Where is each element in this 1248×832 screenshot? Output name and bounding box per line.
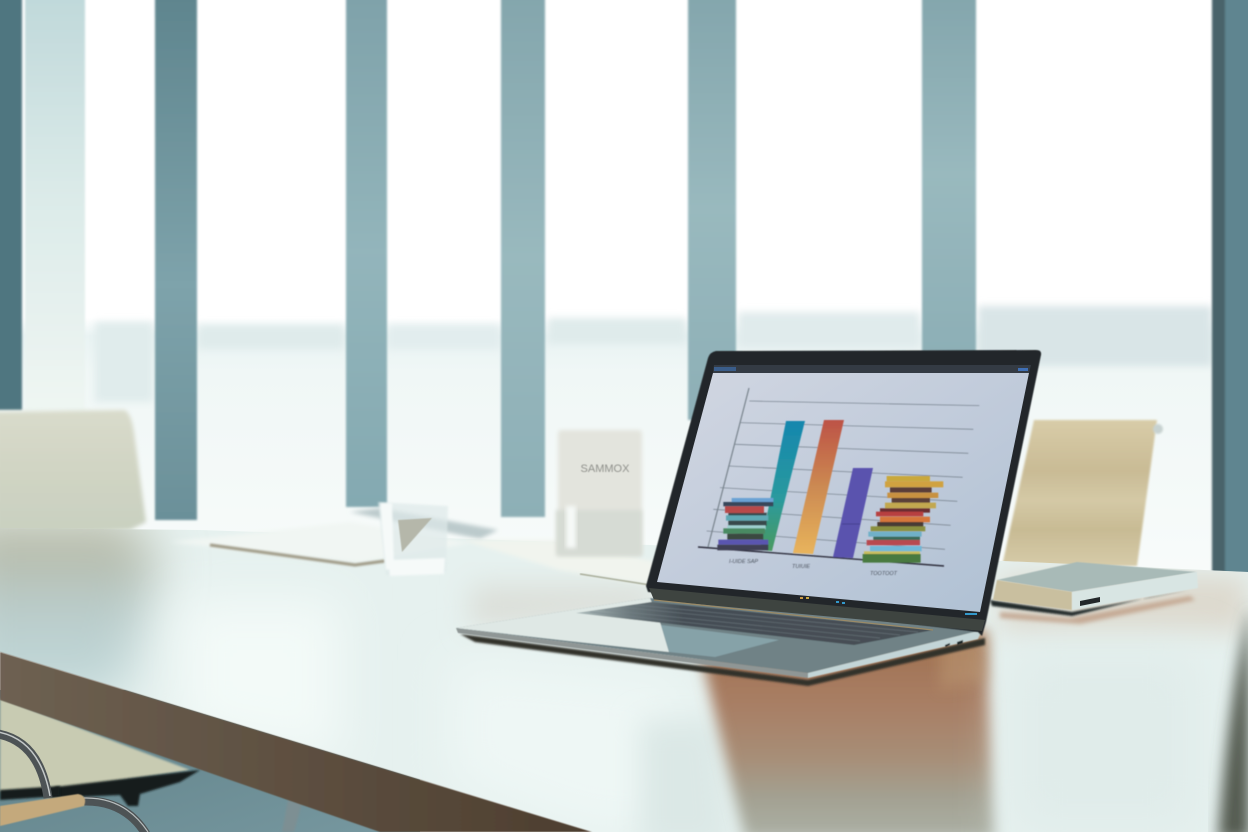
purple bar [833, 468, 873, 558]
left book stack [717, 498, 773, 550]
orange bar [793, 420, 844, 554]
right table tone [1000, 575, 1248, 632]
ports [945, 640, 963, 647]
laptop base deck [456, 598, 982, 678]
table leg [282, 800, 302, 832]
papers on table [170, 508, 655, 585]
slot [1080, 597, 1100, 606]
right chair back [1002, 420, 1163, 566]
screen bezel [646, 350, 1041, 636]
window background [0, 0, 1248, 600]
distant skyline haze [95, 306, 1212, 402]
near chair under the table [0, 698, 200, 806]
left table tone [0, 520, 160, 700]
table top surface [0, 500, 1248, 832]
curtain panel [25, 0, 85, 412]
bar chart [698, 388, 979, 577]
laptop reflection [700, 630, 995, 832]
laptop [456, 350, 1041, 686]
table edge [0, 652, 592, 832]
card text: SAMMOX [581, 463, 630, 475]
chart labels [729, 559, 898, 577]
laptop shadow [460, 634, 985, 686]
keyboard [576, 602, 933, 645]
foreground shadow [1218, 605, 1248, 832]
left chair back [0, 410, 146, 538]
dock icons [800, 597, 977, 615]
display [657, 373, 1029, 612]
tablet device on table [990, 562, 1198, 616]
chart labels: I-UIDE SAP [729, 559, 758, 565]
chart labels: TOOTOOT [870, 571, 898, 577]
tablet reflection [1000, 596, 1195, 624]
water glass [378, 502, 448, 576]
mid reflections [178, 608, 332, 750]
grid lines [707, 401, 979, 549]
right book stack [863, 476, 943, 563]
window columns [0, 0, 1248, 574]
reflection highlight [940, 635, 985, 690]
chart labels: TUIUIE [792, 564, 810, 570]
floor under table [0, 690, 420, 832]
axes [708, 388, 749, 547]
teal bar [760, 421, 805, 551]
top bar [713, 365, 1031, 373]
name card with glass [556, 430, 642, 556]
near chair armrest [0, 732, 148, 832]
